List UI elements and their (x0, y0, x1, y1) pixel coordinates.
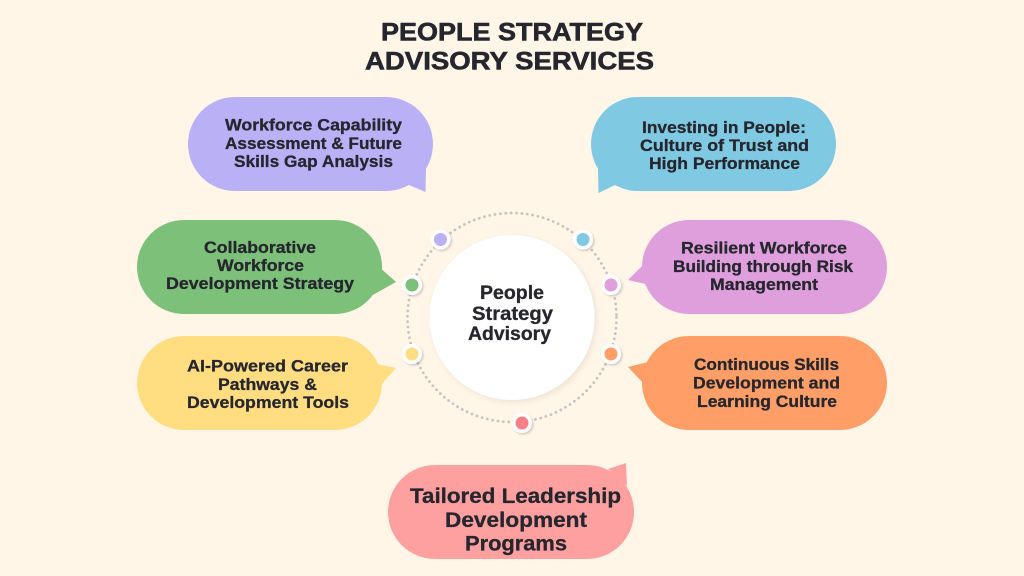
panel: tailored leadership development (388, 463, 634, 559)
panel: continuous skills development: Development and (693, 374, 840, 392)
panel: investing in people: High Performance (649, 154, 800, 173)
node: orange (601, 344, 621, 364)
panel: collaborative workforce development (137, 220, 396, 314)
node: green (402, 275, 422, 295)
panel: resilient workforce: Resilient Workforce (681, 238, 847, 258)
panel: resilient workforce: Building through Risk (673, 257, 854, 276)
panel: investing in people: Investing in People: (642, 118, 806, 137)
panel: continuous skills development (628, 336, 887, 430)
panel: workforce capability assessment (188, 97, 433, 192)
panel: resilient workforce: Management (710, 275, 818, 294)
panel: AI-powered career pathways: Development Tools (187, 393, 349, 412)
panel: AI-powered career pathways: AI-Powered Career (187, 356, 348, 376)
panel: investing in people: Culture of Trust and (640, 136, 809, 155)
panel: collaborative workforce development: Development Strategy (166, 274, 355, 293)
panel: tailored leadership development: Programs (465, 532, 567, 556)
panel: investing in people (591, 97, 836, 193)
node: red (512, 413, 532, 433)
panel: tailored leadership development: Tailored Leadership (410, 485, 621, 508)
title (365, 18, 654, 76)
center circle: People Strategy Advisory (430, 235, 594, 400)
panel: workforce capability assessment: Workforce Capability (225, 116, 403, 134)
title: ADVISORY SERVICES (365, 48, 654, 76)
dotted ring (408, 213, 616, 422)
node: yellow (402, 344, 422, 364)
node: purple (430, 230, 450, 250)
node: pink (601, 275, 621, 295)
center circle: People Strategy Advisory: Advisory (468, 324, 551, 345)
center circle: People Strategy Advisory: People (480, 283, 544, 304)
panel: continuous skills development: Continuous Skills (694, 355, 839, 374)
panel: AI-powered career pathways (137, 336, 396, 430)
center circle: People Strategy Advisory: Strategy (472, 304, 553, 325)
title: PEOPLE STRATEGY (381, 18, 643, 46)
panel: workforce capability assessment: Skills Gap Analysis (234, 152, 393, 171)
panel: continuous skills development: Learning Culture (697, 392, 837, 411)
node: blue (573, 230, 593, 250)
panel: tailored leadership development: Development (445, 509, 587, 532)
panel: collaborative workforce development: Collaborative (204, 238, 316, 257)
panel: workforce capability assessment: Assessment & Future (225, 134, 402, 153)
panel: resilient workforce (628, 220, 887, 314)
panel: collaborative workforce development: Workforce (217, 256, 304, 275)
panel: AI-powered career pathways: Pathways & (218, 375, 317, 394)
